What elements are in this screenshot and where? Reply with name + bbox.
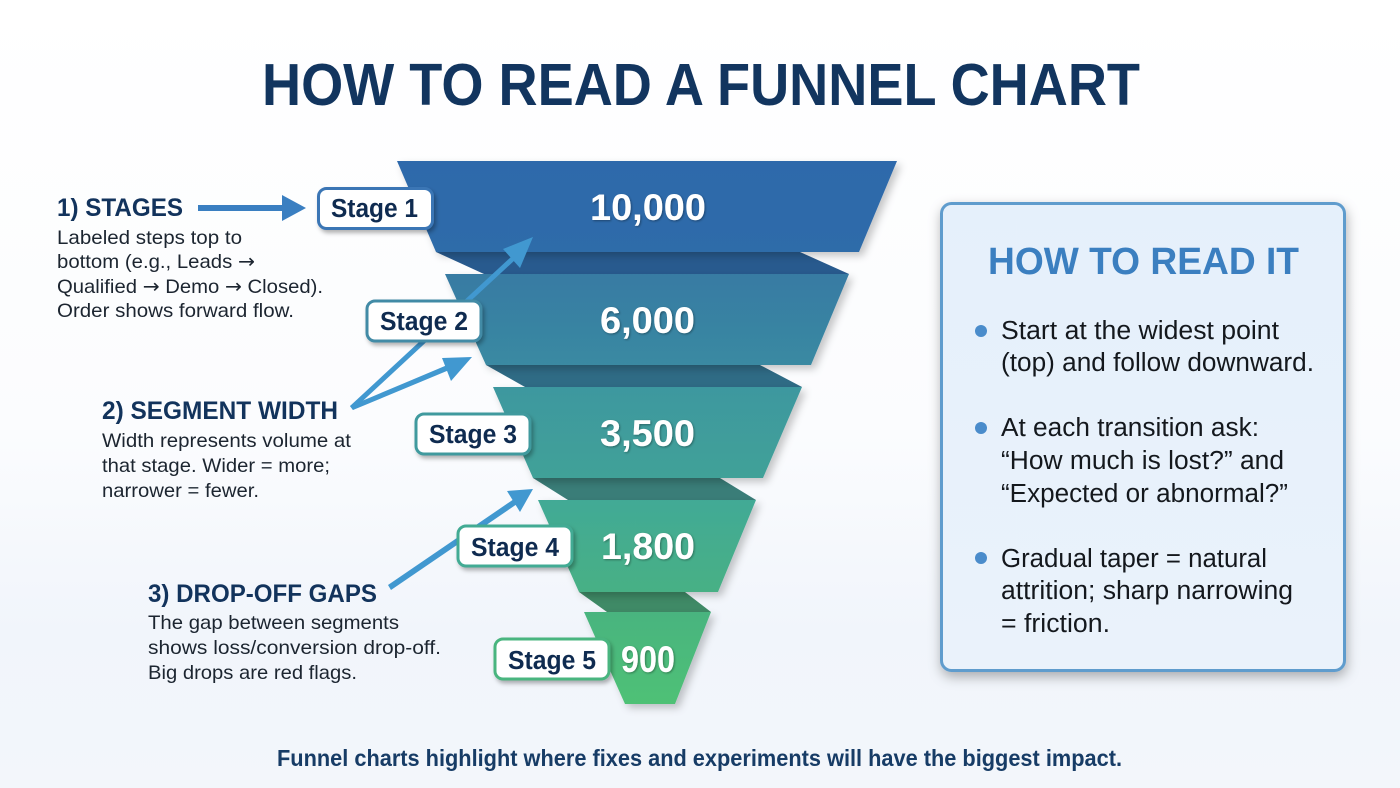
stage 2 label: Stage 2 bbox=[380, 308, 468, 336]
segment 2 bbox=[445, 274, 849, 365]
stage 3 label bbox=[416, 414, 530, 454]
drop-off gap 4 bbox=[579, 592, 711, 612]
bullet 1: Start at the widest point bbox=[1001, 317, 1279, 345]
stage 1 label bbox=[318, 188, 432, 228]
value 6,000: 6,000 bbox=[600, 300, 695, 341]
arrow: drop-off gaps bbox=[388, 489, 533, 590]
arrows: segment width bbox=[350, 237, 533, 410]
bullet 2: At each transition ask: bbox=[1001, 414, 1259, 442]
annotation: segment width: that stage. Wider = more; bbox=[102, 455, 330, 477]
drop-off gap 2 bbox=[486, 365, 802, 387]
bullet 1 bbox=[975, 317, 1314, 377]
bullet 3: attrition; sharp narrowing bbox=[1001, 577, 1293, 605]
bullet 3: Gradual taper = natural bbox=[1001, 545, 1267, 573]
footer takeaway: Funnel charts highlight where fixes and experiments will have the biggest impact. bbox=[277, 745, 1122, 771]
stage 5 label: Stage 5 bbox=[508, 647, 596, 675]
segment 4 bbox=[538, 500, 756, 592]
bullet 3: = friction. bbox=[1001, 610, 1110, 638]
segment 3 bbox=[493, 387, 802, 478]
drop-off gap 3 bbox=[533, 478, 756, 500]
value 1,800: 1,800 bbox=[601, 526, 695, 567]
value 900: 900 bbox=[621, 639, 675, 680]
annotation: segment width: 2) SEGMENT WIDTH bbox=[102, 397, 338, 425]
annotation: stages bbox=[57, 194, 323, 322]
annotation: drop-off gaps: 3) DROP-OFF GAPS bbox=[148, 580, 377, 608]
annotation: drop-off gaps: shows loss/conversion drop-off. bbox=[148, 637, 441, 659]
annotation: stages: Order shows forward flow. bbox=[57, 300, 294, 322]
bullet 2: “Expected or abnormal?” bbox=[1001, 480, 1288, 508]
bullet 3 bbox=[975, 545, 1293, 638]
annotation: stages: bottom (e.g., Leads → bbox=[57, 250, 255, 273]
annotation: stages: 1) STAGES bbox=[57, 194, 183, 222]
title: HOW TO READ A FUNNEL CHART bbox=[262, 52, 1140, 118]
panel: how to read it bbox=[942, 204, 1344, 670]
segment 1 bbox=[397, 161, 897, 252]
bullet 2 bbox=[975, 414, 1288, 508]
annotation: stages: Labeled steps top to bbox=[57, 227, 242, 249]
segment 5 bbox=[584, 612, 711, 704]
annotation: segment width: narrower = fewer. bbox=[102, 480, 259, 502]
panel heading: HOW TO READ IT bbox=[988, 241, 1299, 283]
stage 2 label bbox=[367, 301, 481, 341]
annotation: drop-off gaps: Big drops are red flags. bbox=[148, 662, 357, 684]
stage 4 label bbox=[458, 526, 572, 566]
bullet 2: “How much is lost?” and bbox=[1001, 447, 1284, 475]
annotation: drop-off gaps: The gap between segments bbox=[148, 612, 399, 634]
stage 4 label: Stage 4 bbox=[471, 534, 560, 562]
stage 1 label: Stage 1 bbox=[331, 195, 418, 223]
value 3,500: 3,500 bbox=[600, 413, 695, 454]
annotation: stages: Qualified → Demo → Closed). bbox=[57, 275, 323, 298]
stage 3 label: Stage 3 bbox=[429, 421, 517, 449]
annotation: drop-off gaps bbox=[148, 580, 441, 684]
bullet 1: (top) and follow downward. bbox=[1001, 349, 1314, 377]
funnel chart bbox=[397, 161, 897, 704]
arrow: stages to stage 1 bbox=[198, 195, 306, 221]
drop-off gap 1 bbox=[436, 252, 849, 274]
annotation: segment width bbox=[102, 397, 352, 502]
value 10,000: 10,000 bbox=[590, 187, 706, 228]
annotation: segment width: Width represents volume at bbox=[102, 430, 352, 452]
stage 5 label bbox=[495, 639, 609, 679]
